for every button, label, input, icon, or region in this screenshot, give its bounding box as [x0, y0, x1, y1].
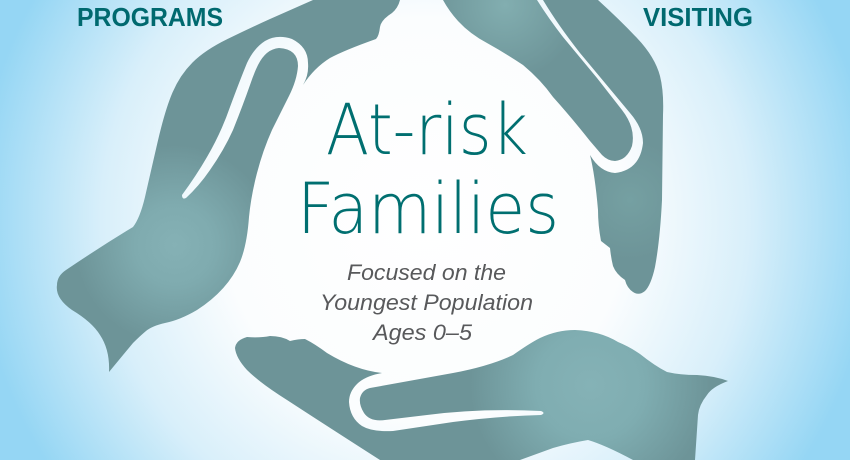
subtitle text: [320, 260, 533, 345]
label: programs: PROGRAMS: [77, 2, 223, 32]
icon: right hand: [443, 0, 663, 294]
title: At-risk Families: At-risk: [326, 89, 528, 171]
subtitle text: Ages 0–5: [371, 320, 473, 345]
title: At-risk Families: [297, 89, 559, 250]
title: At-risk Families: Families: [297, 168, 559, 250]
icon: left hand: [57, 0, 400, 372]
subtitle text: Focused on the: [347, 260, 506, 285]
subtitle text: Youngest Population: [320, 290, 533, 315]
icon: bottom hand: [235, 330, 728, 460]
label: visiting: VISITING: [643, 2, 753, 32]
